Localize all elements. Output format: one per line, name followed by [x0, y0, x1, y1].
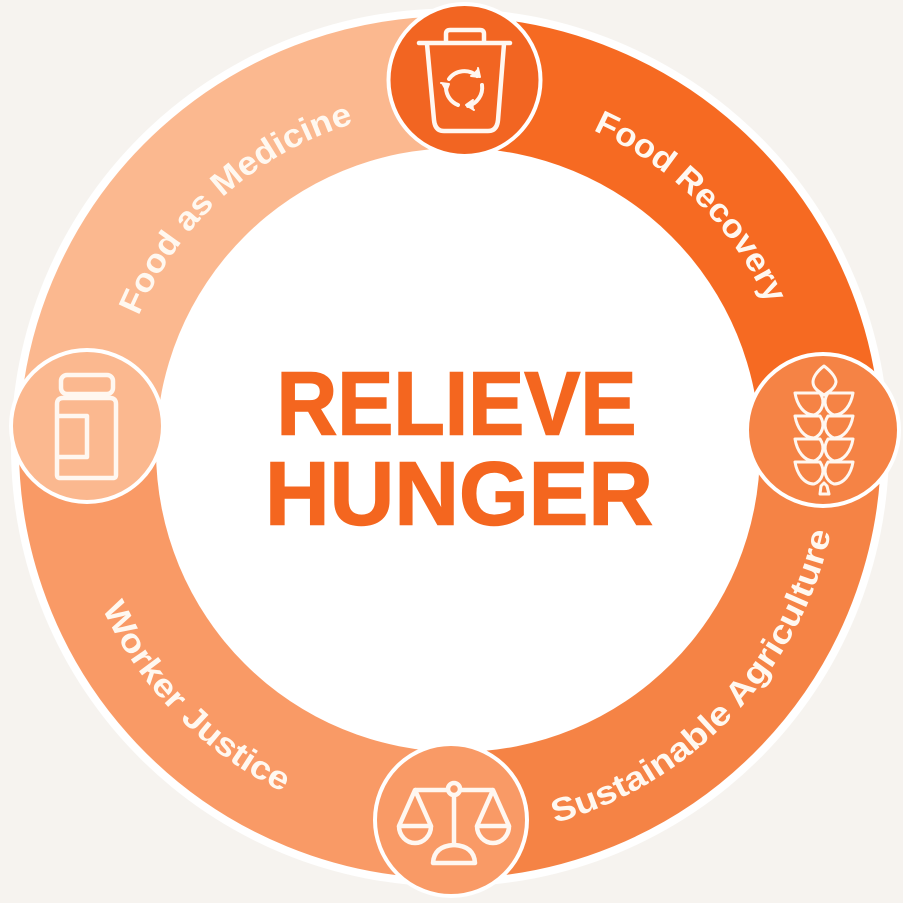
icon: supplement bottle: [11, 350, 163, 502]
segment labels: [104, 108, 830, 821]
title: Relieve Hunger: [265, 354, 653, 544]
icon: scales of justice: [375, 744, 527, 896]
label: Worker Justice: Worker Justice: [104, 598, 288, 790]
icon: recycling bin: [388, 4, 540, 156]
icon: wheat: [747, 354, 899, 506]
title: Relieve Hunger: HUNGER: [265, 444, 653, 544]
label: Food Recovery: Food Recovery: [595, 110, 784, 298]
centre white disc: [156, 148, 760, 752]
ring: four coloured segments: [94, 92, 806, 804]
label: Food as Medicine: Food as Medicine: [118, 108, 351, 314]
label: Sustainable Agriculture: Sustainable Agriculture: [552, 531, 830, 821]
title: Relieve Hunger: RELIEVE: [276, 354, 636, 454]
